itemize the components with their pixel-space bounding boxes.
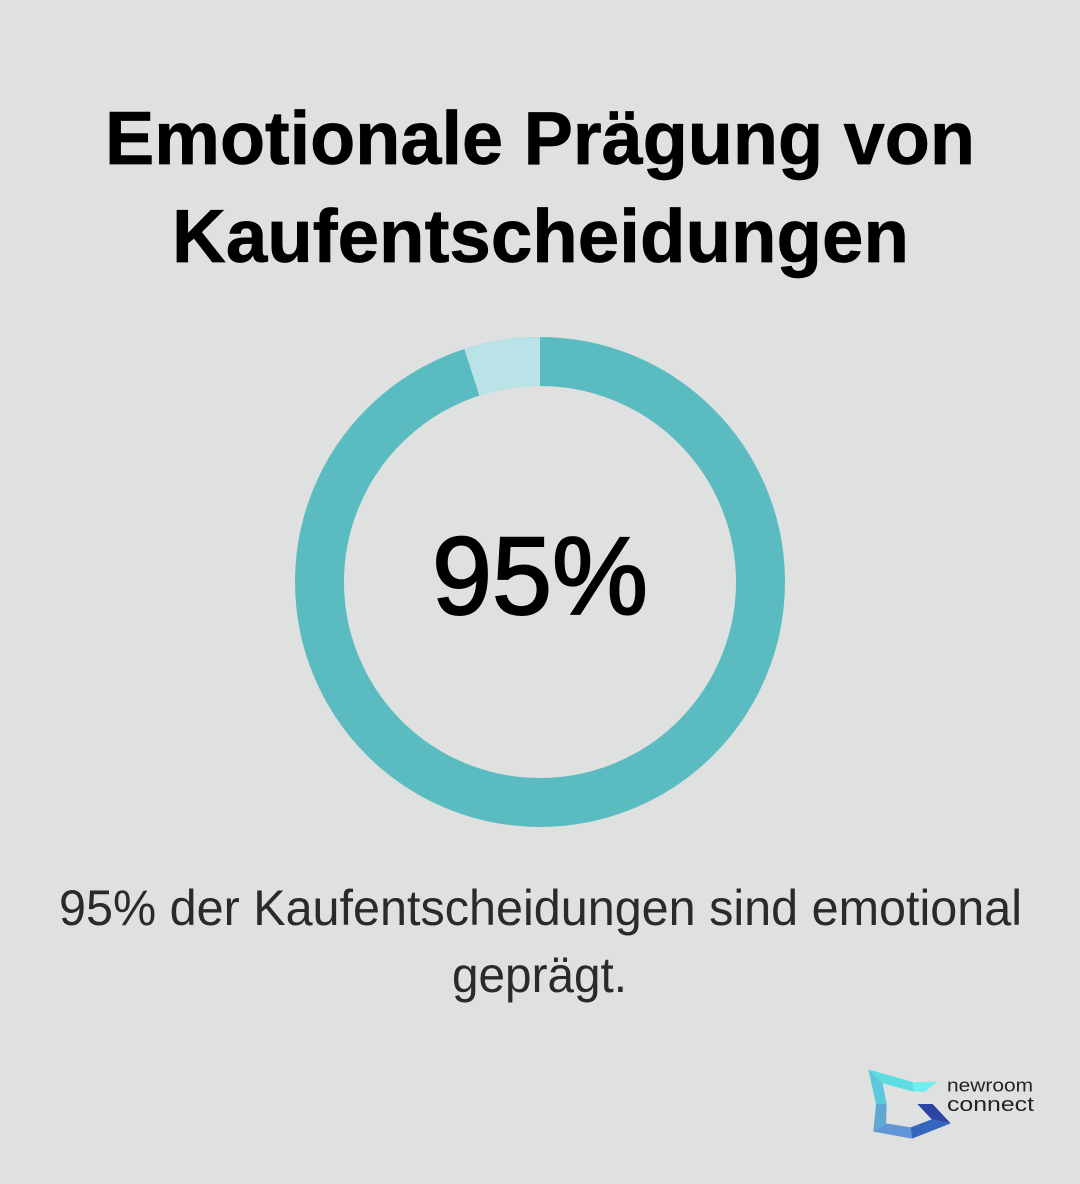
- caption: [59, 880, 1022, 1003]
- caption: 95% der Kaufentscheidungen sind emotional: [59, 880, 1022, 936]
- caption: geprägt.: [452, 947, 627, 1003]
- logo wordmark: [947, 1074, 1035, 1116]
- title: Kaufentscheidungen: [172, 194, 909, 278]
- big percentage value: 95%: [432, 515, 648, 638]
- icon: logo mark: [868, 1069, 951, 1139]
- donut chart: 95%: [320, 337, 760, 802]
- logo wordmark: newroom: [947, 1074, 1033, 1096]
- logo: newroom connect: [868, 1069, 1035, 1139]
- logo wordmark: connect: [947, 1094, 1035, 1116]
- title: [105, 96, 975, 278]
- title: Emotionale Prägung von: [105, 96, 975, 180]
